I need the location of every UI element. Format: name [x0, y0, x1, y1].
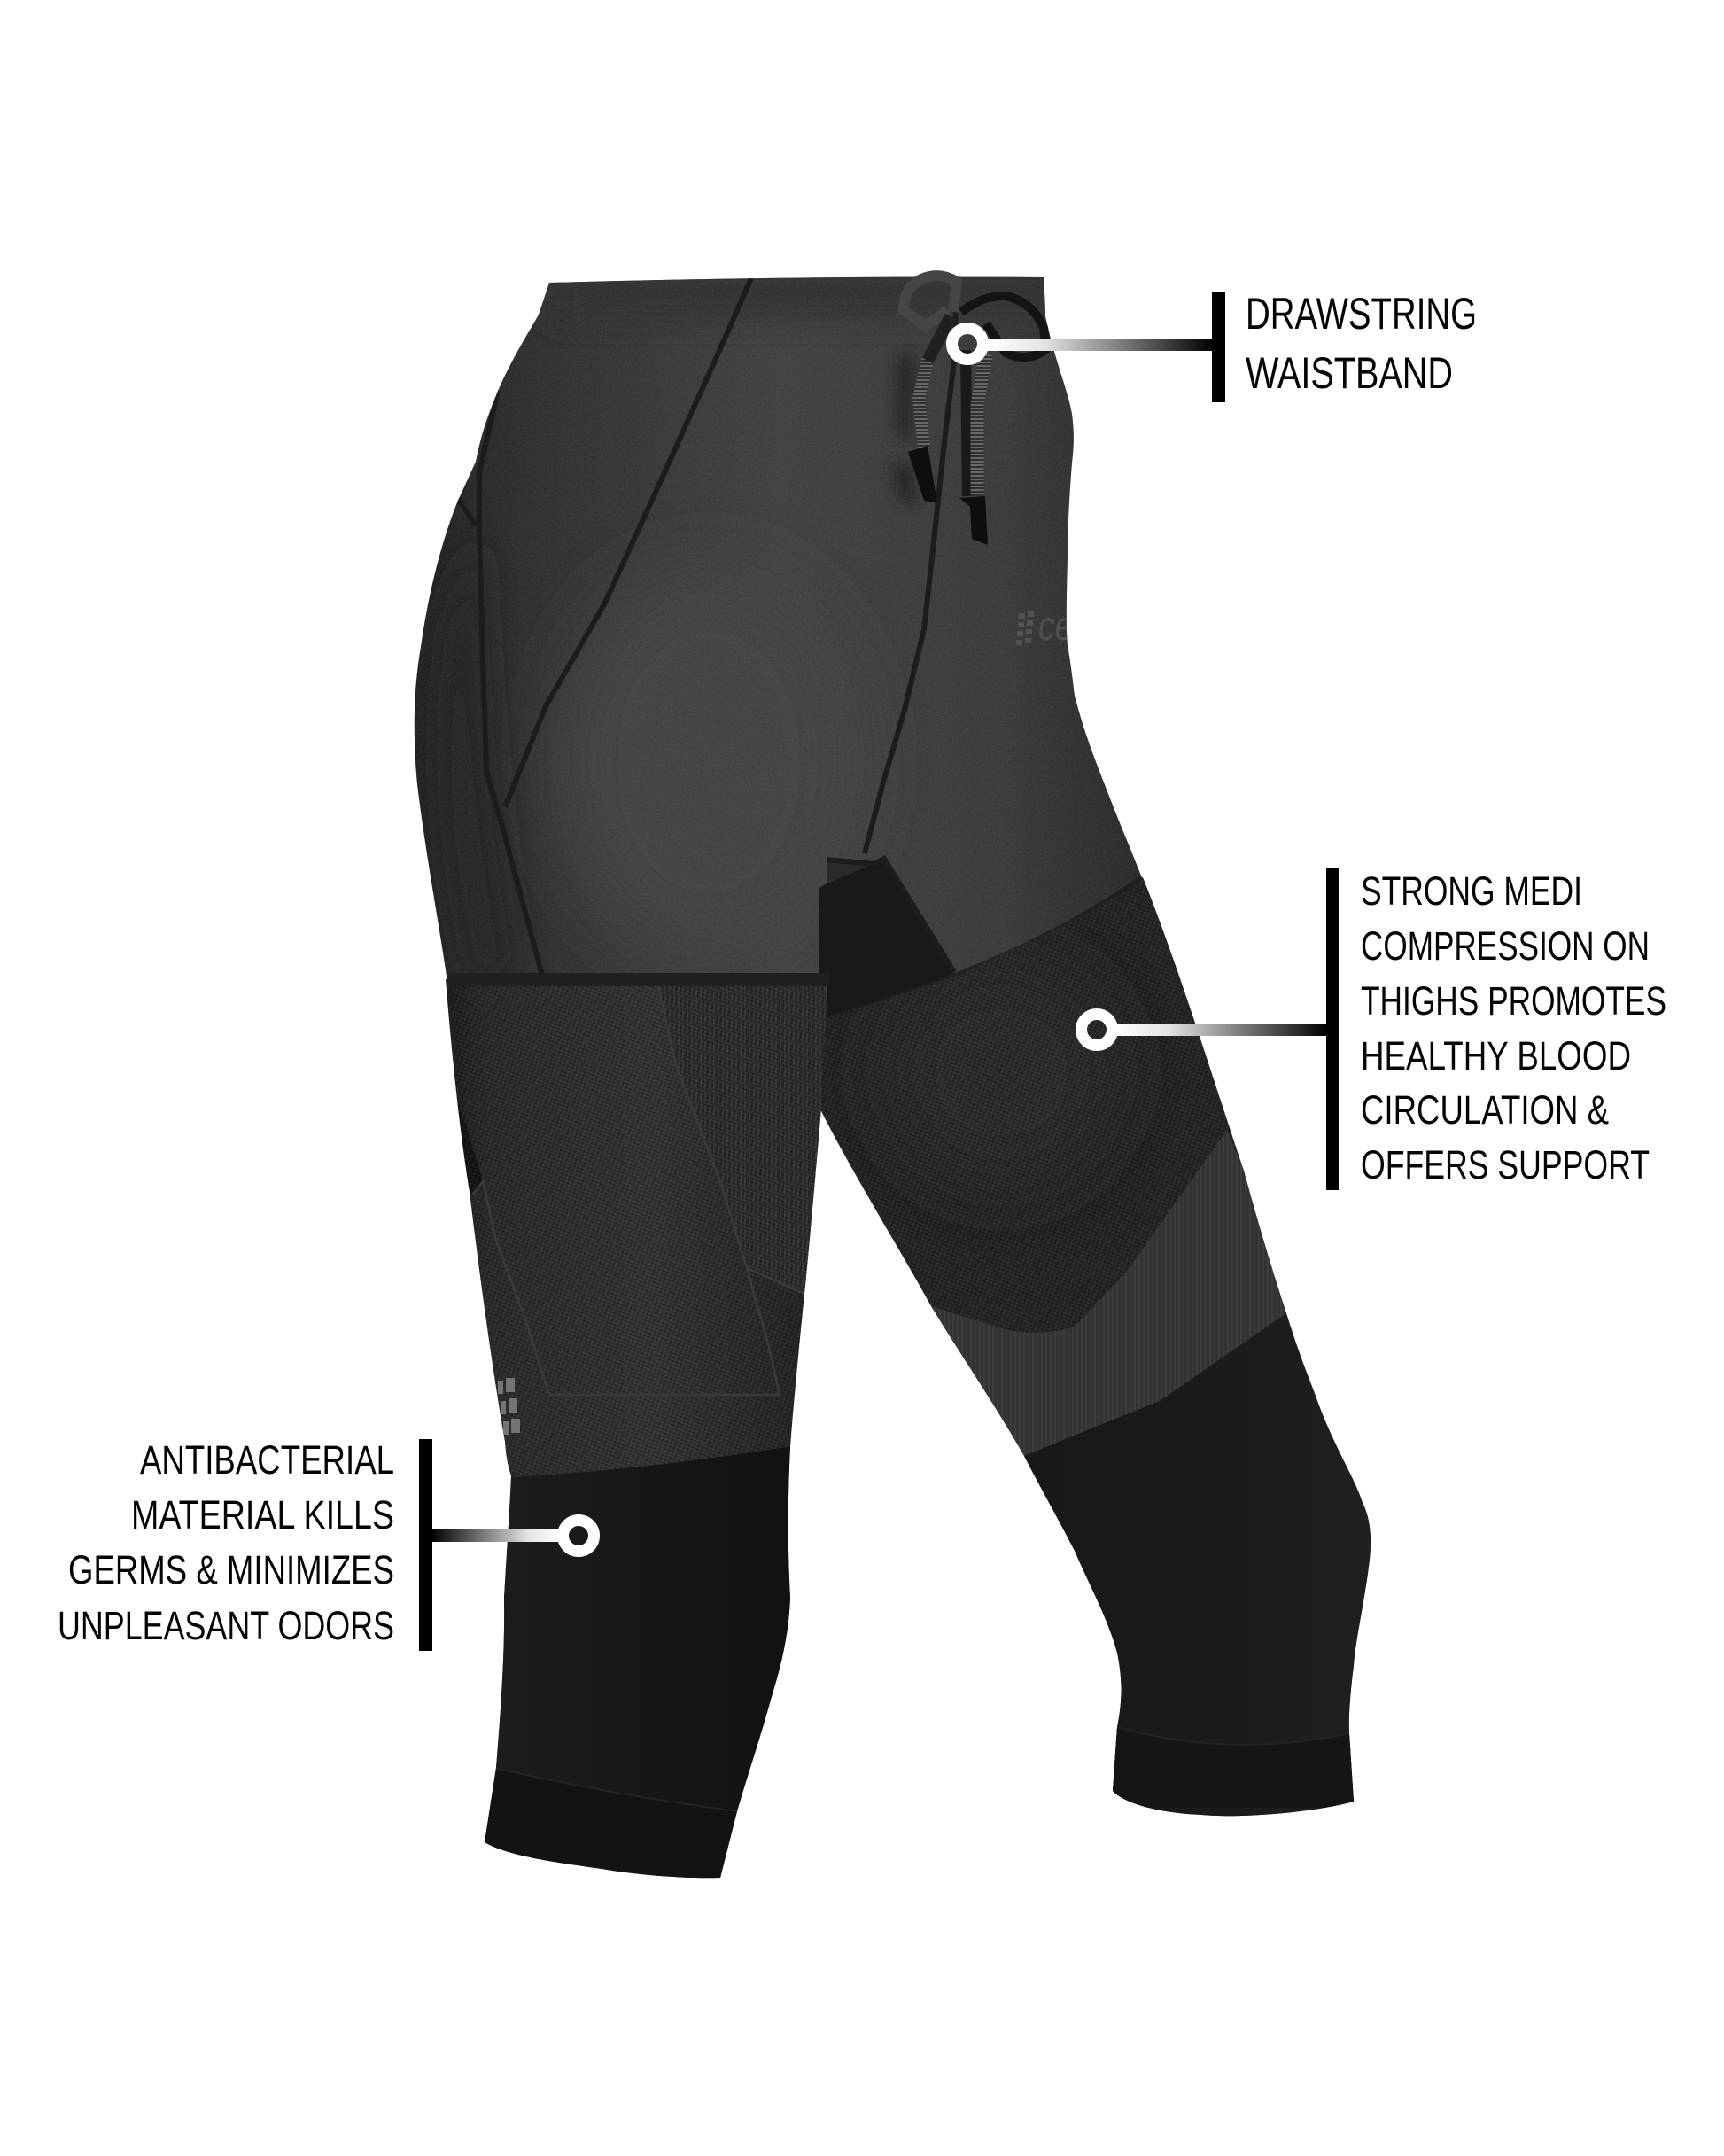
hem band left: [443, 973, 829, 986]
marker ring: [563, 1521, 594, 1551]
marker ring: [951, 328, 983, 360]
label: DRAWSTRING: [1246, 289, 1477, 339]
bar: [1326, 868, 1339, 1190]
label: WAISTBAND: [1246, 348, 1453, 398]
logo on hip: [1016, 611, 1067, 645]
connector line: [987, 339, 1214, 351]
label: OFFERS SUPPORT: [1361, 1142, 1650, 1187]
dark notch: [457, 1101, 482, 1195]
lighter knit band: [931, 1130, 1286, 1456]
end tabs: [908, 446, 937, 503]
label: STRONG MEDI: [1361, 868, 1582, 914]
fabric shadows near drawstring: [890, 354, 917, 505]
label: COMPRESSION ON: [1361, 923, 1650, 969]
bar: [1212, 292, 1225, 402]
label: ANTIBACTERIAL: [140, 1437, 394, 1483]
label: CIRCULATION &: [1361, 1087, 1609, 1132]
label: MATERIAL KILLS: [131, 1492, 394, 1537]
seams: [457, 275, 957, 976]
marker ring: [1081, 1014, 1113, 1046]
label: UNPLEASANT ODORS: [58, 1603, 394, 1648]
callout: antibacterial material: [58, 1437, 594, 1651]
darker ribbed side panel: [658, 979, 828, 1294]
dark lower leg: [1024, 1313, 1371, 1817]
label: GERMS & MINIMIZES: [68, 1547, 394, 1592]
drawstring: [904, 276, 1046, 545]
icon: leg logo squares: [498, 1378, 520, 1435]
label: [1361, 868, 1666, 1187]
label: [58, 1437, 394, 1648]
right cuff: [1107, 1727, 1355, 1808]
right string: [966, 350, 967, 496]
dark knee section: [470, 1445, 797, 1887]
crotch inner fabric: [819, 860, 957, 1028]
label: [1246, 289, 1477, 398]
shorts upper fabric: [408, 266, 1152, 1028]
left string: [919, 316, 951, 448]
right leg: [820, 877, 1371, 1817]
left loop: [904, 276, 957, 326]
bar: [419, 1439, 432, 1651]
infographic canvas: [60, 270, 1666, 1879]
label: HEALTHY BLOOD: [1361, 1033, 1631, 1078]
callout: drawstring waistband: [951, 289, 1477, 402]
knit panel seam: [472, 986, 804, 1395]
callout: thigh compression: [1081, 868, 1666, 1190]
connector line: [431, 1529, 561, 1542]
product photo: compression tights: [408, 266, 1417, 1896]
hem band right: [886, 876, 1143, 1000]
left cuff: [478, 1768, 737, 1883]
right loop: [961, 296, 1046, 357]
logo squares: [1016, 611, 1034, 645]
logo wordmark: cep: [1038, 603, 1091, 649]
connector line: [1114, 1024, 1328, 1036]
left leg: [434, 975, 833, 1896]
